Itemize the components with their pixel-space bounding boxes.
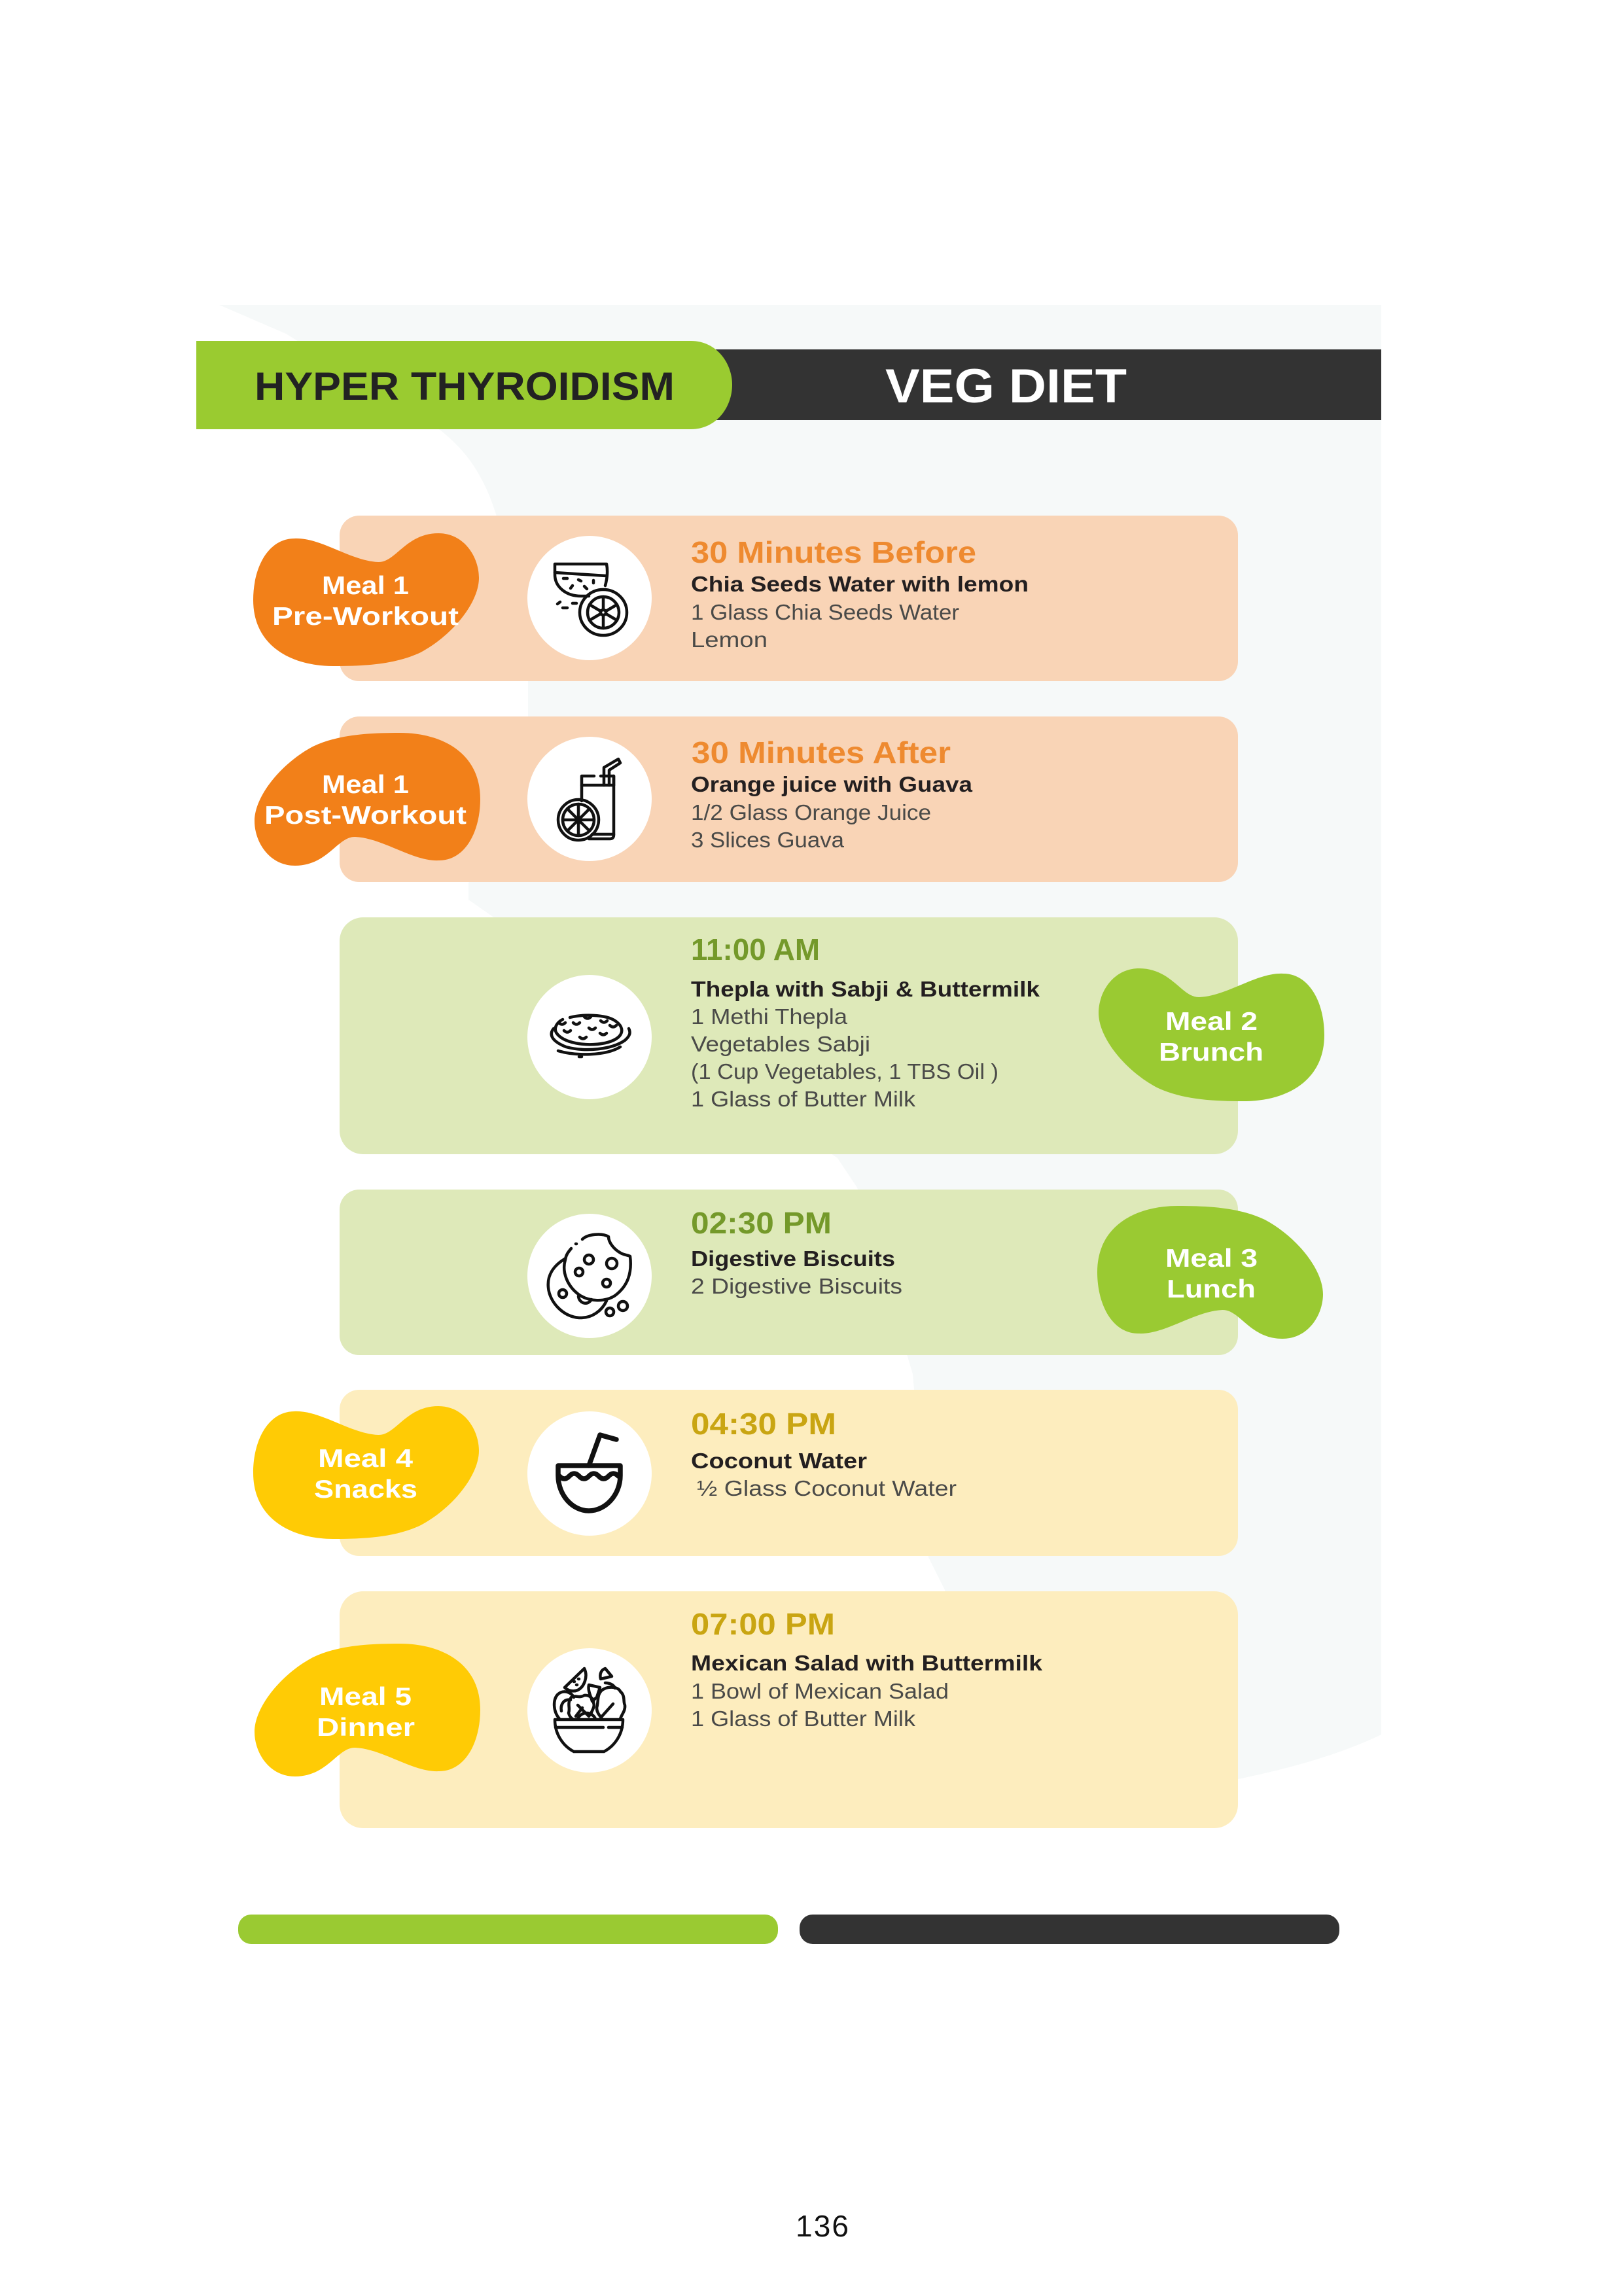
panel background	[340, 716, 1238, 882]
meal title: Coconut Water	[691, 1449, 867, 1473]
footer bar: green	[238, 1915, 778, 1944]
badge label line 2: Snacks	[314, 1475, 417, 1504]
panel background	[340, 1190, 1238, 1355]
panel background	[340, 917, 1238, 1154]
background pale shape	[219, 305, 1381, 1779]
footer bar: dark	[800, 1915, 1339, 1944]
badge label line 1: Meal 2	[1165, 1008, 1258, 1036]
icon: thepla stack	[552, 1016, 630, 1057]
time heading: 11:00 AM	[691, 932, 820, 966]
meal item: Lemon	[691, 627, 768, 652]
time heading: 04:30 PM	[691, 1407, 836, 1441]
badge label line 2: Brunch	[1159, 1038, 1263, 1067]
meal item: 1/2 Glass Orange Juice	[691, 800, 931, 824]
meal title: Orange juice with Guava	[691, 772, 973, 796]
heading: hyper thyroidism: HYPER THYROIDISM	[255, 364, 675, 408]
panel: meal 1 pre-workout	[253, 516, 1238, 681]
blob badge	[1097, 1206, 1323, 1339]
blob badge	[253, 533, 479, 666]
meal title: Thepla with Sabji & Buttermilk	[691, 977, 1040, 1001]
badge label line 2: Post-Workout	[264, 802, 467, 830]
meal item: 1 Glass of Butter Milk	[691, 1706, 916, 1731]
badge label line 1: Meal 5	[319, 1683, 412, 1711]
panel: meal 2 brunch	[340, 917, 1324, 1154]
meal title: Mexican Salad with Buttermilk	[691, 1651, 1043, 1675]
meal item: Vegetables Sabji	[691, 1032, 870, 1056]
icon circle	[527, 1411, 652, 1536]
meal item: ½ Glass Coconut Water	[697, 1476, 957, 1500]
badge label line 2: Dinner	[317, 1714, 415, 1742]
panel: meal 5 dinner	[255, 1591, 1238, 1828]
icon circle	[527, 737, 652, 861]
heading: veg diet: VEG DIET	[885, 360, 1127, 413]
meal item: 2 Digestive Biscuits	[691, 1274, 902, 1298]
meal item: 1 Methi Thepla	[691, 1004, 848, 1029]
badge label line 1: Meal 4	[318, 1445, 413, 1473]
badge label line 1: Meal 1	[322, 572, 409, 600]
icon: chia bowl and lemon	[555, 564, 627, 635]
panel: meal 4 snacks	[253, 1390, 1238, 1556]
icon: coconut water	[558, 1435, 620, 1511]
panel background	[340, 1390, 1238, 1556]
header banner	[196, 341, 1381, 429]
meal title: Digestive Biscuits	[691, 1246, 895, 1271]
blob badge	[255, 1644, 480, 1776]
blob badge	[1099, 968, 1324, 1101]
header dark bar	[687, 349, 1381, 420]
meal title: Chia Seeds Water with lemon	[691, 572, 1029, 596]
badge label line 2: Lunch	[1167, 1275, 1256, 1303]
blob badge	[253, 1406, 479, 1539]
badge label line 1: Meal 3	[1165, 1245, 1258, 1273]
time heading: 07:00 PM	[691, 1607, 835, 1641]
meal item: 1 Glass of Butter Milk	[691, 1087, 916, 1111]
meal item: (1 Cup Vegetables, 1 TBS Oil )	[691, 1059, 998, 1084]
icon circle	[527, 536, 652, 660]
meal item: 1 Glass Chia Seeds Water	[691, 600, 959, 624]
icon circle	[527, 975, 652, 1099]
panel background	[340, 1591, 1238, 1828]
icon: salad bowl	[554, 1669, 625, 1752]
time heading: 02:30 PM	[691, 1206, 832, 1240]
page number: 136	[796, 2209, 849, 2243]
panel background	[340, 516, 1238, 681]
panel: meal 3 lunch	[340, 1190, 1323, 1355]
meal item: 3 Slices Guava	[691, 828, 845, 852]
icon circle	[527, 1648, 652, 1773]
blob badge	[255, 733, 480, 866]
panel: meal 1 post-workout	[255, 716, 1238, 882]
header green tab	[196, 341, 732, 429]
time heading: 30 Minutes After	[692, 735, 951, 769]
icon circle	[527, 1214, 652, 1338]
icon: juice glass and orange	[558, 759, 620, 840]
badge label line 1: Meal 1	[322, 771, 409, 799]
meal item: 1 Bowl of Mexican Salad	[691, 1679, 949, 1703]
time heading: 30 Minutes Before	[691, 535, 976, 569]
icon: biscuits	[548, 1235, 631, 1318]
badge label line 2: Pre-Workout	[272, 603, 459, 631]
